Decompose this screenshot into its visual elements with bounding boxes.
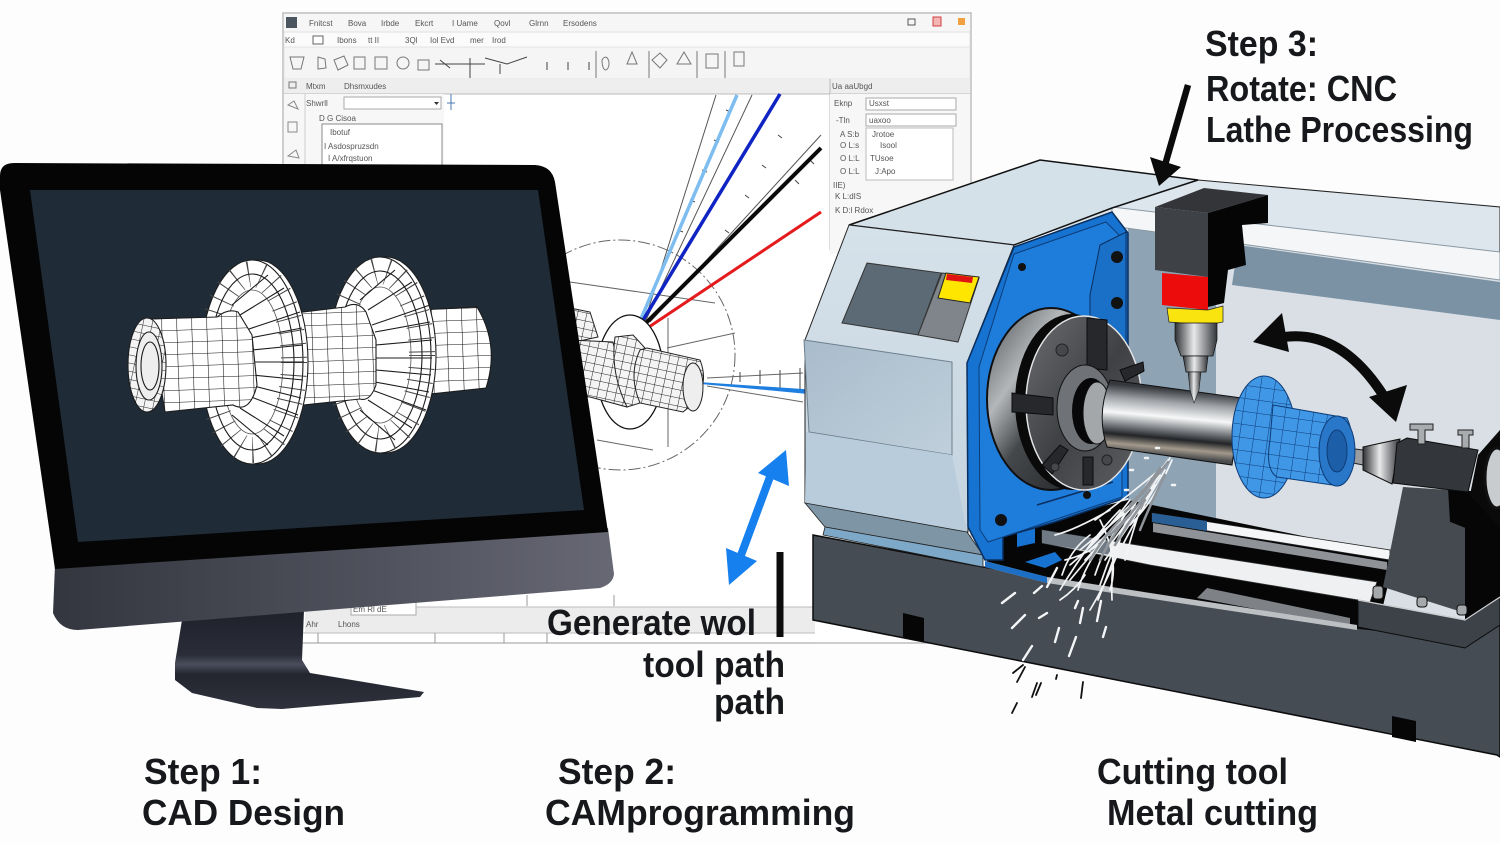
machine housing xyxy=(804,160,1198,567)
machine base xyxy=(813,535,1500,757)
window status bar: Em Rl dE xyxy=(353,605,387,614)
window icon ribbon xyxy=(284,47,970,79)
left tree panel: Shwrll xyxy=(306,99,328,108)
window status bar: Lhons xyxy=(338,620,360,629)
right properties panel: Usxst xyxy=(869,99,890,108)
right properties panel: Jrotoe xyxy=(872,130,895,139)
right properties panel: O L:L xyxy=(840,154,860,163)
tailstock collar xyxy=(1363,439,1400,484)
red collar xyxy=(1162,273,1208,310)
tailstock support xyxy=(1383,487,1465,613)
collet xyxy=(1175,323,1217,356)
step 3 heading xyxy=(1205,23,1473,150)
window tool bar: Ibons xyxy=(337,36,357,45)
right properties panel: IIE) xyxy=(833,181,846,190)
chuck groove xyxy=(1015,314,1129,490)
window menu bar: Ersodens xyxy=(563,19,597,28)
cutting label: Metal cutting xyxy=(1107,792,1318,833)
window status bar xyxy=(300,595,815,643)
left tree panel: Ibotuf xyxy=(330,128,351,137)
step 1 label: Step 1: xyxy=(144,751,262,792)
monitor chin xyxy=(53,528,614,630)
yellow button xyxy=(938,273,979,303)
upper rail strips xyxy=(1152,513,1390,560)
tool head side xyxy=(1208,195,1268,307)
step 2 label: CAMprogramming xyxy=(545,792,855,833)
yellow collar xyxy=(1167,306,1223,325)
text: generate tool path: Generate wol xyxy=(547,602,756,643)
arrow: blue double arrow xyxy=(726,450,789,585)
chuck hub xyxy=(1057,365,1113,451)
middle cylinder xyxy=(295,304,376,405)
tool head top xyxy=(1155,188,1268,213)
right properties panel: K D:l Rdox xyxy=(835,206,873,215)
drafting construction lines xyxy=(505,95,821,470)
step 2 label: Step 2: xyxy=(558,751,676,792)
drawing crosshair mark xyxy=(447,94,455,110)
part rear hex xyxy=(570,308,598,342)
chuck xyxy=(987,308,1144,490)
metal chips and sparks xyxy=(1002,448,1175,713)
chuck face xyxy=(1026,316,1142,490)
right properties panel: J:Apo xyxy=(875,167,896,176)
left tree panel: D G Cisoa xyxy=(319,114,356,123)
lower guide strip xyxy=(1197,588,1350,627)
cutting tool head xyxy=(1155,188,1268,403)
window panel header bar xyxy=(284,79,970,250)
tool head front xyxy=(1155,207,1208,277)
window tool bar: mer xyxy=(470,36,484,45)
monitor xyxy=(0,163,614,709)
right properties panel: uaxoo xyxy=(869,116,891,125)
black sparks xyxy=(1012,665,1083,713)
tailstock body xyxy=(1393,438,1478,492)
window panel header bar: Mtxm xyxy=(306,82,326,91)
housing chamfer xyxy=(805,503,983,555)
right properties panel: A S:b xyxy=(840,130,860,139)
arrow: curved rotation arrow xyxy=(1253,313,1407,422)
wireframe part on monitor xyxy=(128,257,491,464)
machine rear wall xyxy=(1040,160,1500,640)
chip cluster xyxy=(1055,448,1175,610)
window menu bar: Qovl xyxy=(494,19,511,28)
left cylinder xyxy=(128,311,257,412)
machine rail channel xyxy=(985,500,1395,640)
right properties panel xyxy=(830,94,970,254)
black marker bar xyxy=(776,552,784,637)
wireframe part on CAM screen xyxy=(570,308,704,429)
part end cap xyxy=(683,363,703,411)
step 3 heading: Rotate: CNC xyxy=(1206,68,1397,109)
lower door panel xyxy=(804,340,952,455)
right properties panel: Isool xyxy=(880,141,897,150)
main slide rail xyxy=(1042,530,1377,602)
left tree panel: I A/xfrqstuon xyxy=(328,154,372,163)
step 3 heading: Step 3: xyxy=(1205,23,1318,64)
right properties panel: O L:L xyxy=(840,167,860,176)
monitor screen xyxy=(30,190,584,542)
window menu bar: Ekcrt xyxy=(415,19,434,28)
arrow: step 3 pointer xyxy=(1150,85,1188,186)
chuck outer ring xyxy=(987,308,1115,490)
window menu bar: Irbde xyxy=(381,19,400,28)
left tree panel xyxy=(284,94,444,174)
tool path lines xyxy=(634,94,821,393)
window menu bar: Fnitcst xyxy=(309,19,333,28)
base top strip xyxy=(985,561,1357,630)
chuck jaws xyxy=(1012,318,1144,485)
tailstock knobs xyxy=(1410,424,1473,448)
window tool bar: Kd xyxy=(285,36,295,45)
window panel header bar: Dhsmxudes xyxy=(344,82,386,91)
text: generate tool path: tool path xyxy=(643,644,785,685)
part collar xyxy=(614,335,645,407)
second flange xyxy=(329,257,436,453)
tailstock xyxy=(1338,424,1500,648)
window menu bar: Glrnn xyxy=(529,19,549,28)
text: generate tool path xyxy=(547,602,785,722)
right properties panel: TUsoe xyxy=(870,154,894,163)
housing foot strip xyxy=(823,527,983,567)
cutting label xyxy=(1097,751,1318,833)
panel: CAM software window xyxy=(283,13,971,643)
step 1 label xyxy=(142,751,345,833)
spindle shaft xyxy=(1102,380,1242,465)
blue carriage blocks xyxy=(1017,526,1062,568)
tailstock spindle xyxy=(1338,447,1363,465)
window menu bar: I Uame xyxy=(452,19,478,28)
text: generate tool path: path xyxy=(714,681,785,722)
control panel screen xyxy=(842,263,941,335)
monitor stand xyxy=(175,610,424,709)
step 1 label: CAD Design xyxy=(142,792,345,833)
window tool bar: tt II xyxy=(368,36,379,45)
right properties panel: K L:dIS xyxy=(835,192,861,201)
window tool bar xyxy=(284,32,970,47)
part left section xyxy=(570,340,627,407)
step 3 heading: Lathe Processing xyxy=(1206,109,1473,150)
right properties panel: -Tln xyxy=(836,116,850,125)
red button xyxy=(946,274,973,283)
left tree panel: I Asdospruzsdn xyxy=(324,142,379,151)
right cylinder xyxy=(420,307,491,394)
right properties panel: Eknp xyxy=(834,99,853,108)
part flange outline xyxy=(597,315,663,429)
window tool bar: Iol Evd xyxy=(430,36,454,45)
housing top xyxy=(849,160,1198,245)
window tool bar: 3Ql xyxy=(405,36,418,45)
housing front panel xyxy=(805,225,1014,532)
window panel header bar: Ua aaUbgd xyxy=(832,82,872,91)
tailstock side shadow xyxy=(1448,488,1500,620)
window menu bar: Bova xyxy=(348,19,367,28)
step 2 label xyxy=(545,751,855,833)
right properties panel: O L:s xyxy=(840,141,859,150)
sparks on base xyxy=(1002,568,1106,660)
first flange xyxy=(201,260,308,464)
window status bar: Ahr xyxy=(306,620,319,629)
part right cylinder xyxy=(634,348,704,412)
blue workpiece xyxy=(1232,376,1355,498)
blue chuck panel xyxy=(967,212,1128,560)
handwheel xyxy=(1470,430,1500,528)
base foot slots xyxy=(903,613,1416,742)
window menu bar xyxy=(284,14,970,32)
tailstock bolts xyxy=(1373,586,1467,615)
window tool bar: Irod xyxy=(492,36,506,45)
control panel side xyxy=(918,273,979,342)
tailstock base plate xyxy=(1358,597,1500,648)
tool bit xyxy=(1188,372,1201,403)
monitor bezel xyxy=(0,163,608,569)
cutting label: Cutting tool xyxy=(1097,751,1288,792)
